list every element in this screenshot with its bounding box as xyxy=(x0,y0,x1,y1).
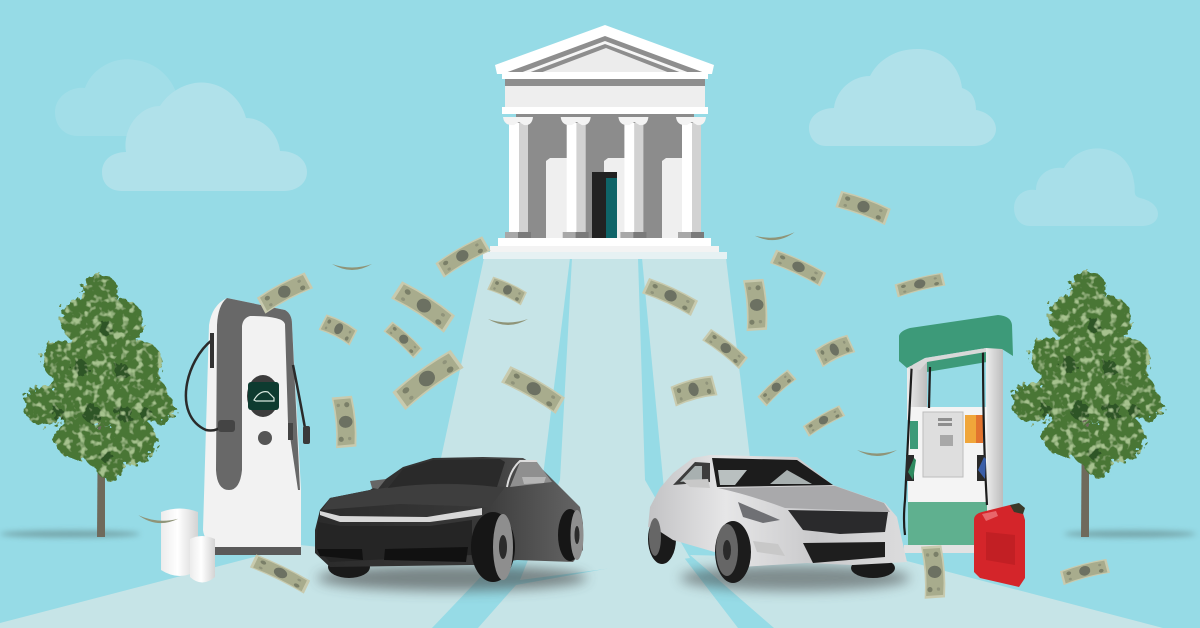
cloud: faint upper left xyxy=(55,59,198,136)
road: left light beam xyxy=(432,258,570,500)
front wheel xyxy=(471,512,515,582)
road: right foreground xyxy=(690,555,1163,628)
bill xyxy=(391,280,456,333)
display panel xyxy=(923,412,963,477)
dark side panel xyxy=(216,298,300,490)
gas pump xyxy=(899,315,1013,553)
nozzles xyxy=(906,455,914,481)
bill xyxy=(835,189,891,225)
bill xyxy=(256,271,313,314)
front left tire xyxy=(328,556,370,578)
pediment xyxy=(495,25,714,74)
bill xyxy=(670,374,718,406)
bill xyxy=(1060,558,1110,585)
screen xyxy=(247,375,279,417)
canopy xyxy=(899,315,1013,368)
front wheel xyxy=(715,521,751,583)
hood xyxy=(322,484,505,510)
side window xyxy=(673,462,710,485)
shadow xyxy=(1064,530,1196,538)
bill xyxy=(250,553,311,594)
chrome arc xyxy=(507,461,537,487)
small battery xyxy=(190,536,215,582)
left cable xyxy=(186,340,222,430)
door xyxy=(592,172,617,238)
bill xyxy=(770,248,827,286)
large battery xyxy=(161,508,198,576)
bill xyxy=(332,264,372,270)
car body xyxy=(315,457,583,567)
cloud: large left xyxy=(102,82,307,191)
red fuel can xyxy=(974,503,1025,587)
bill xyxy=(857,450,897,456)
bill xyxy=(921,545,947,599)
bill xyxy=(894,272,945,297)
bill xyxy=(319,313,358,346)
fog light xyxy=(753,541,785,556)
green lower panel xyxy=(908,502,987,545)
bill xyxy=(755,232,795,242)
car body xyxy=(648,455,907,567)
mirror xyxy=(682,479,710,488)
green back of canopy xyxy=(927,348,987,372)
shadow xyxy=(0,530,140,538)
grille xyxy=(317,549,363,560)
road: left foreground xyxy=(0,545,492,628)
windshield xyxy=(712,458,833,487)
right front tire xyxy=(851,558,895,578)
road: center foreground xyxy=(478,555,738,628)
hood xyxy=(718,486,890,512)
side window xyxy=(510,462,552,487)
pillars xyxy=(907,360,927,420)
bill xyxy=(332,396,358,448)
batteries xyxy=(161,508,215,582)
bill xyxy=(383,321,423,359)
bill xyxy=(487,276,527,305)
silver gas car xyxy=(648,455,907,583)
tree: right xyxy=(1012,271,1196,538)
road: center light beam xyxy=(520,258,690,580)
car shadows xyxy=(317,565,587,591)
rear tire xyxy=(648,514,676,564)
flying dollar bills xyxy=(138,189,1110,599)
button xyxy=(258,431,272,445)
charger base xyxy=(215,547,301,555)
mirror xyxy=(522,477,546,484)
bill xyxy=(802,404,845,437)
entablature xyxy=(502,72,708,79)
windshield xyxy=(388,459,505,488)
lower grille xyxy=(803,542,885,563)
road: right light beam xyxy=(642,258,755,500)
wall xyxy=(516,114,694,238)
pump body xyxy=(908,407,987,502)
bill xyxy=(642,277,699,316)
price panel xyxy=(965,415,983,443)
tree: left xyxy=(0,274,175,538)
bill xyxy=(814,333,855,367)
cloud: upper right xyxy=(809,49,996,146)
fascia xyxy=(316,520,472,562)
bill xyxy=(488,319,528,325)
black electric car xyxy=(315,457,584,582)
charger body xyxy=(203,298,301,547)
hoses xyxy=(904,360,912,535)
bill xyxy=(391,348,464,410)
bill xyxy=(743,279,769,331)
right cable xyxy=(293,365,305,428)
bill xyxy=(501,365,566,414)
bill xyxy=(757,369,797,407)
cloud: far right xyxy=(1014,148,1158,226)
bill xyxy=(138,515,178,525)
steps xyxy=(498,238,711,246)
light bar xyxy=(320,508,482,522)
bill xyxy=(435,235,491,278)
columns xyxy=(503,117,533,238)
bank building xyxy=(483,25,727,259)
upper grille xyxy=(788,510,888,534)
bill xyxy=(702,328,749,369)
headlight xyxy=(738,502,780,523)
rear wheel rim xyxy=(649,518,661,556)
ev charger xyxy=(186,298,310,555)
rear wheel xyxy=(558,509,582,561)
